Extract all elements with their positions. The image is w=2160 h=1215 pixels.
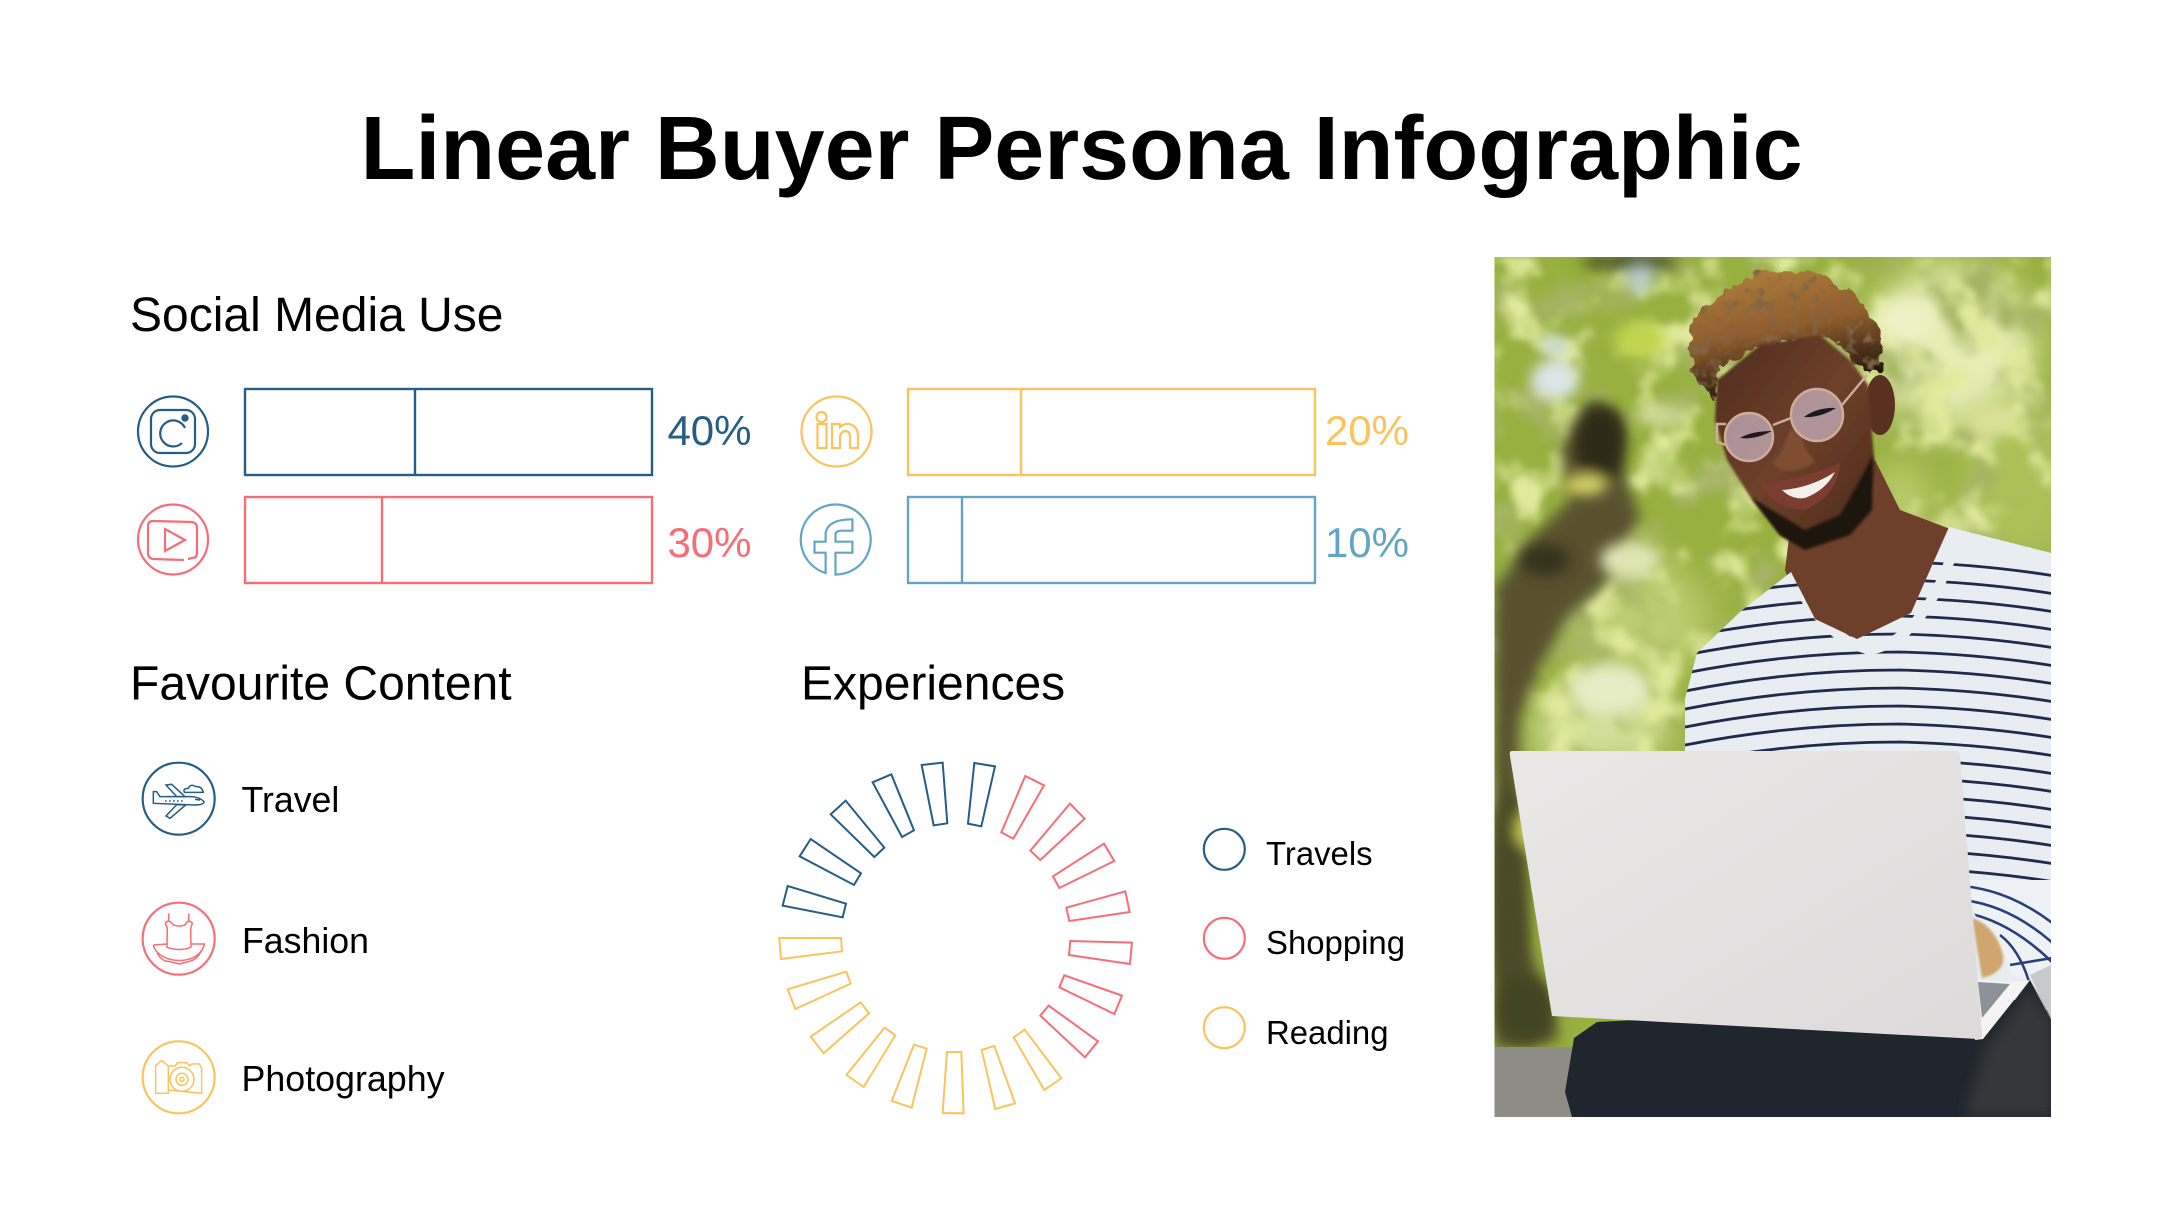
bar: youtube 30% [245, 497, 652, 583]
label: travel: Travel [242, 780, 339, 820]
legend: reading [1204, 1007, 1389, 1051]
label: fashion: Fashion [242, 921, 369, 961]
heading: experiences: Experiences [801, 658, 1065, 710]
neck [1785, 460, 1953, 650]
panel: experiences [779, 658, 1405, 1113]
icon: linkedin [802, 396, 872, 466]
title: Linear Buyer Persona Infographic [360, 99, 1803, 199]
bar: linkedin 20% [908, 389, 1315, 475]
mouth [1760, 463, 1840, 510]
panel: social media use [130, 289, 1409, 583]
label: 40%: 40% [667, 407, 752, 454]
ear [1865, 375, 1895, 435]
heading: social media use: Social Media Use [130, 289, 504, 342]
legend: travels [1204, 829, 1373, 872]
legend: travels: Travels [1266, 835, 1373, 872]
label: 10%: 10% [1325, 519, 1409, 566]
beard [1752, 455, 1873, 550]
hand [1972, 918, 2003, 978]
foliage highlights [1494, 257, 2052, 817]
label: 30%: 30% [667, 519, 752, 566]
icon: instagram [138, 396, 208, 466]
laptop base [1975, 980, 2030, 1040]
face [1715, 335, 1875, 548]
label: 20%: 20% [1325, 407, 1409, 454]
legend: reading: Reading [1266, 1014, 1389, 1051]
eyes [1740, 408, 1836, 438]
laptop lid [1510, 751, 1982, 1039]
trousers [1565, 980, 2051, 1117]
icon: fashion dress [143, 903, 215, 975]
bar: facebook 10% [908, 497, 1315, 583]
segments: shopping [1001, 776, 1132, 1057]
icon: facebook [801, 505, 871, 575]
bar: instagram 40% [245, 389, 652, 475]
shirt [1685, 527, 2051, 1010]
shirt hem [2030, 965, 2051, 1018]
chart: radial segments [779, 763, 1132, 1113]
legend: shopping [1204, 918, 1405, 961]
segments: reading [779, 938, 1061, 1113]
panel: favourite content [130, 658, 512, 1113]
glasses [1717, 375, 1867, 461]
tree trunk [1494, 400, 1640, 1050]
sleeve [2032, 880, 2051, 883]
heading: favourite content: Favourite Content [130, 658, 512, 710]
photo: smiling man with laptop [1492, 254, 2080, 1117]
stone ledge [1494, 1047, 1572, 1117]
icon: photography camera [143, 1041, 215, 1113]
legend: shopping: Shopping [1266, 924, 1405, 961]
segments: travels [783, 763, 995, 917]
foliage texture [1494, 257, 2051, 751]
icon: youtube [138, 504, 208, 574]
icon: travel plane [143, 763, 215, 835]
nose [1772, 425, 1815, 471]
hair [1690, 270, 1882, 400]
label: photography: Photography [242, 1059, 445, 1099]
